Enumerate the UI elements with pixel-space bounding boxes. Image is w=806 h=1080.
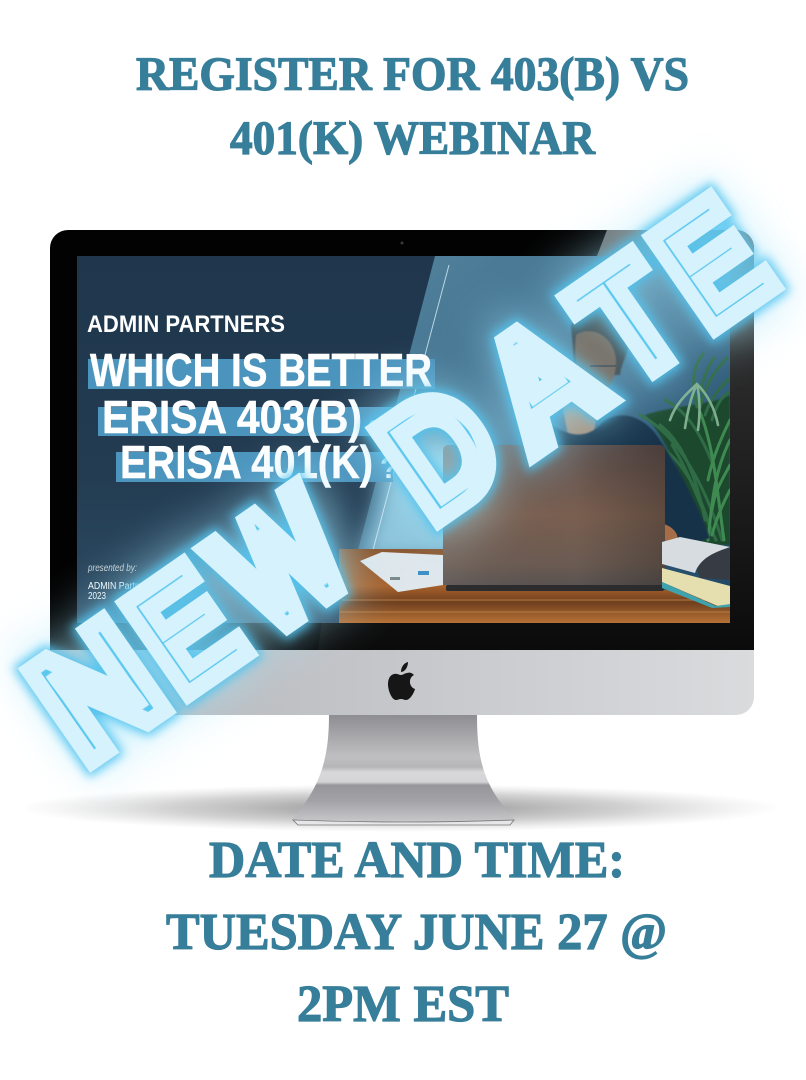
slide heading: ERISA 403(B) (102, 391, 362, 443)
lettering: A (458, 288, 625, 475)
books (662, 568, 730, 607)
inner neon line: N (6, 592, 189, 790)
lettering: D (352, 356, 526, 548)
lettering (6, 170, 794, 790)
inner neon line: T (549, 228, 710, 412)
tight inner glow: T (549, 228, 710, 412)
slide heading: ERISA 401(K) (120, 436, 373, 488)
monitor bezel (50, 230, 754, 650)
slide heading: ADMIN PARTNERS (87, 311, 285, 338)
tight inner glow: D (352, 356, 526, 548)
lettering: W (189, 464, 374, 663)
webinar slide on screen (77, 256, 730, 623)
inner neon line: D (352, 356, 526, 548)
slide heading: ? (380, 452, 398, 485)
slide presenter credit: 2023 (88, 591, 106, 602)
title: REGISTER FOR 403(B) VS (136, 48, 689, 101)
icon: apple logo (388, 662, 415, 700)
monitor chin (50, 650, 754, 715)
slide presenter credit: ADMIN Partners (88, 581, 152, 592)
papers on desk (360, 552, 443, 592)
tight inner glow: A (458, 288, 625, 475)
slide presenter credit (88, 564, 139, 599)
lettering: T (549, 228, 710, 412)
inner neon line: E (630, 172, 794, 357)
new date neon stamp (0, 169, 795, 800)
inner neon line: A (458, 288, 625, 475)
slide background (77, 256, 435, 623)
camera (400, 242, 404, 244)
lettering: E (103, 538, 267, 723)
glass line (372, 264, 450, 549)
date and time: 2PM EST (297, 976, 509, 1033)
slide heading: WHICH IS BETTER (90, 344, 432, 396)
laptop (443, 445, 665, 585)
inner neon line: W (189, 464, 374, 663)
date and time: TUESDAY JUNE 27 @ (166, 904, 667, 961)
wide outer glow: NEW DATE (0, 170, 795, 800)
plant (640, 354, 730, 545)
slide heading: or (368, 412, 390, 437)
desktop monitor (18, 230, 782, 832)
tight inner glow: W (189, 464, 374, 663)
date and time (166, 832, 667, 1033)
monitor stand (293, 715, 514, 823)
tight inner glow: N (6, 592, 189, 790)
floor shadow (18, 784, 782, 832)
inner neon line (6, 170, 794, 790)
tight inner glow: E (630, 172, 794, 357)
lettering: E (630, 172, 794, 357)
desk (339, 549, 730, 623)
tight inner glow: E (103, 538, 267, 723)
inner neon line: E (103, 538, 267, 723)
slide presenter credit: presented by: (87, 563, 137, 574)
title: 401(K) WEBINAR (230, 112, 596, 165)
lettering: N (6, 592, 189, 790)
wall photo panel (358, 256, 730, 590)
slide heading (87, 311, 435, 488)
title (136, 48, 689, 165)
tight inner glow (6, 170, 794, 790)
date and time: DATE AND TIME: (209, 832, 625, 889)
woman (552, 310, 710, 545)
